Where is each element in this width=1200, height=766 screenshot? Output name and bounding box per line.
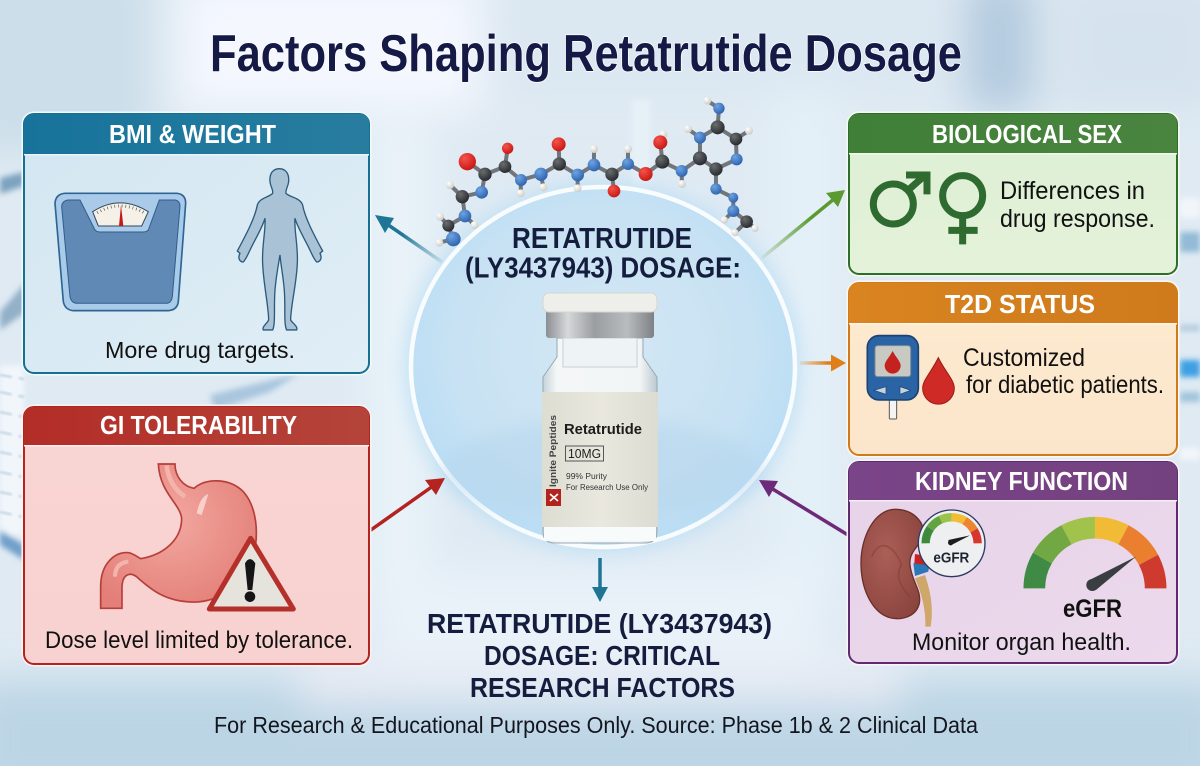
vial label text: 99% Purity <box>566 472 607 481</box>
vial label text: For Research Use Only <box>566 483 648 492</box>
caption: biological sex <box>1000 177 1155 233</box>
bottom heading: RETATRUTIDE (LY3437943) <box>427 608 772 639</box>
panel: biological sex <box>848 113 1178 275</box>
vial label text <box>546 415 648 506</box>
molecule <box>435 97 759 247</box>
icon: kidney with small gauge: eGFR <box>933 550 970 566</box>
icon: weighing scale <box>55 193 186 311</box>
caption: biological sex: Differences in <box>1000 177 1145 205</box>
heading: T2D status: T2D STATUS <box>945 289 1095 319</box>
heading: kidney function: KIDNEY FUNCTION <box>915 466 1128 496</box>
bottom heading: DOSAGE: CRITICAL <box>484 640 720 671</box>
footer note: For Research & Educational Purposes Only. Source: Phase 1b & 2 Clinical Data <box>214 712 978 738</box>
heading: BMI & weight: BMI & WEIGHT <box>109 119 276 149</box>
title: Factors Shaping Retatrutide Dosage <box>210 25 962 83</box>
vial <box>542 293 658 543</box>
caption: GI: Dose level limited by tolerance. <box>45 627 353 654</box>
center heading: (LY3437943) DOSAGE: <box>465 252 741 284</box>
heading: biological sex: BIOLOGICAL SEX <box>932 119 1123 149</box>
icon: large eGFR gauge <box>1034 528 1156 591</box>
arrow: down <box>592 558 608 602</box>
panel: BMI & weight <box>23 113 370 374</box>
panel: T2D status <box>848 282 1178 456</box>
caption: T2D: Customized <box>963 344 1085 372</box>
panel: kidney function <box>848 461 1178 664</box>
heading: GI tolerability: GI TOLERABILITY <box>100 410 297 440</box>
caption: BMI: More drug targets. <box>105 337 295 363</box>
icon: human body <box>237 169 323 330</box>
central circle <box>403 179 803 555</box>
caption: kidney: Monitor organ health. <box>912 629 1131 656</box>
arrow: from GI <box>368 478 445 532</box>
vial label text: 10MG <box>568 447 601 461</box>
panel: GI tolerability <box>23 406 370 665</box>
bottom heading <box>427 608 772 703</box>
arrow: to biological sex <box>762 190 845 258</box>
vial label text: Retatrutide <box>564 421 642 438</box>
arrow: to T2D <box>800 354 846 372</box>
caption: T2D: for diabetic patients. <box>966 371 1164 399</box>
label: eGFR: eGFR <box>1063 595 1122 623</box>
caption: T2D <box>963 344 1164 399</box>
center heading <box>465 223 741 284</box>
arrow: from kidney <box>759 480 848 535</box>
icon: warning triangle <box>209 538 293 609</box>
caption: biological sex: drug response. <box>1000 205 1155 233</box>
bottom heading: RESEARCH FACTORS <box>470 672 735 703</box>
icon: glucose meter and blood drop <box>867 336 954 419</box>
vial label text: Ignite Peptides <box>548 415 558 487</box>
icon: male and female symbols <box>873 174 983 244</box>
arrow: to BMI <box>375 215 442 262</box>
center heading: RETATRUTIDE <box>512 223 692 255</box>
icon: kidney with small gauge <box>861 509 985 627</box>
icon: stomach <box>101 464 256 608</box>
